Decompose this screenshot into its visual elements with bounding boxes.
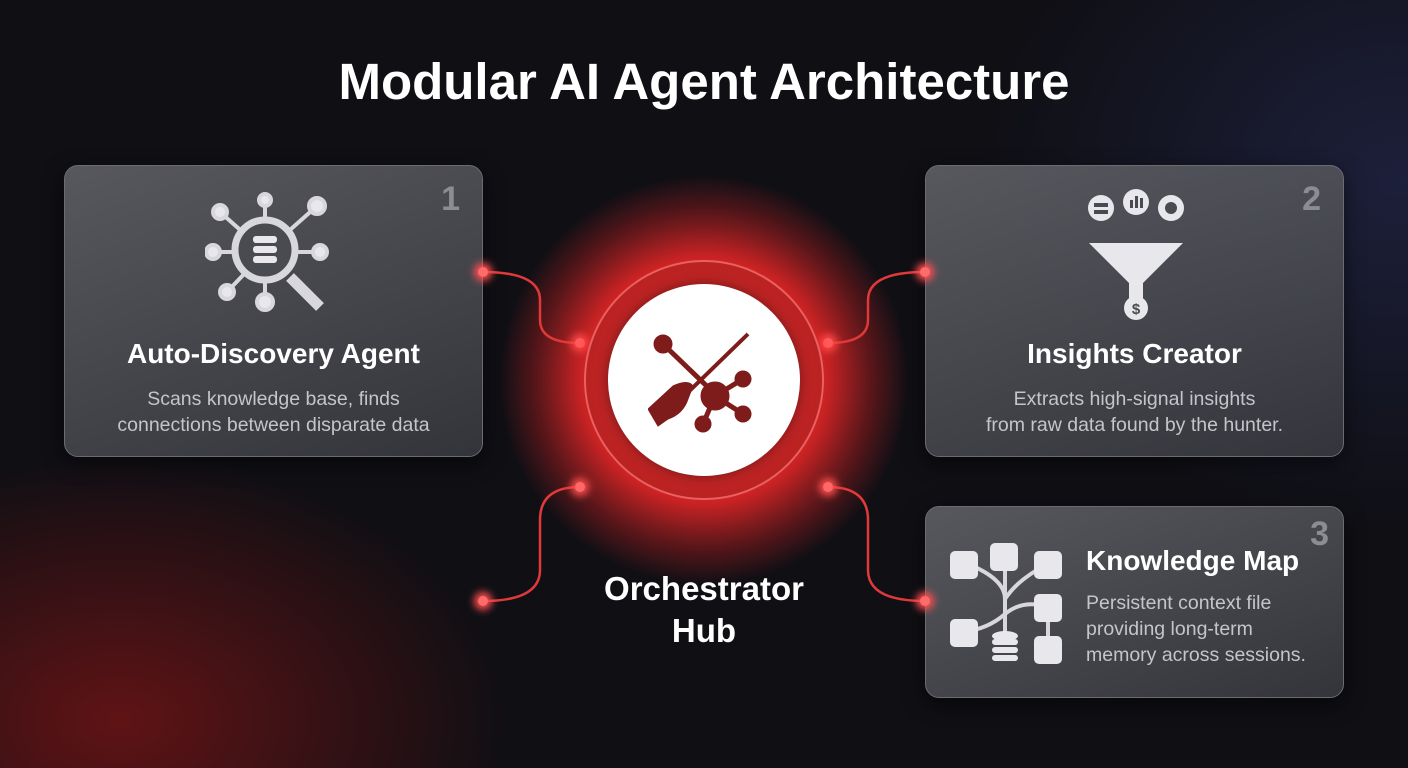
hub label: Hub xyxy=(672,612,736,649)
icon: network search database xyxy=(205,192,329,312)
title: Modular AI Agent Architecture xyxy=(338,53,1070,110)
hub label: Orchestrator xyxy=(604,570,804,607)
description: providing long-term xyxy=(1086,618,1253,640)
hub label xyxy=(604,570,804,649)
description: Extracts high-signal insights xyxy=(1014,388,1255,410)
icon: conductor hand with network xyxy=(608,284,800,476)
orchestrator hub xyxy=(584,260,824,500)
description: connections between disparate data xyxy=(117,414,430,436)
number 1: 1 xyxy=(441,180,460,218)
description: Scans knowledge base, finds xyxy=(147,388,400,410)
icon: knowledge tree xyxy=(950,543,1062,664)
description: memory across sessions. xyxy=(1086,644,1306,666)
number 3: 3 xyxy=(1310,515,1329,553)
description xyxy=(986,388,1283,436)
panel: auto-discovery agent xyxy=(64,165,483,457)
description: Persistent context file xyxy=(1086,592,1271,614)
description xyxy=(117,388,430,436)
panel: knowledge map xyxy=(925,506,1344,698)
icon: funnel: $ xyxy=(1132,301,1141,318)
panel: insights creator xyxy=(925,165,1344,457)
number 2: 2 xyxy=(1302,180,1321,218)
description: from raw data found by the hunter. xyxy=(986,414,1283,436)
heading: Insights Creator xyxy=(1027,338,1242,369)
heading: Auto-Discovery Agent xyxy=(127,338,420,369)
description xyxy=(1086,592,1306,666)
heading: Knowledge Map xyxy=(1086,545,1299,576)
icon: funnel xyxy=(1088,189,1184,320)
